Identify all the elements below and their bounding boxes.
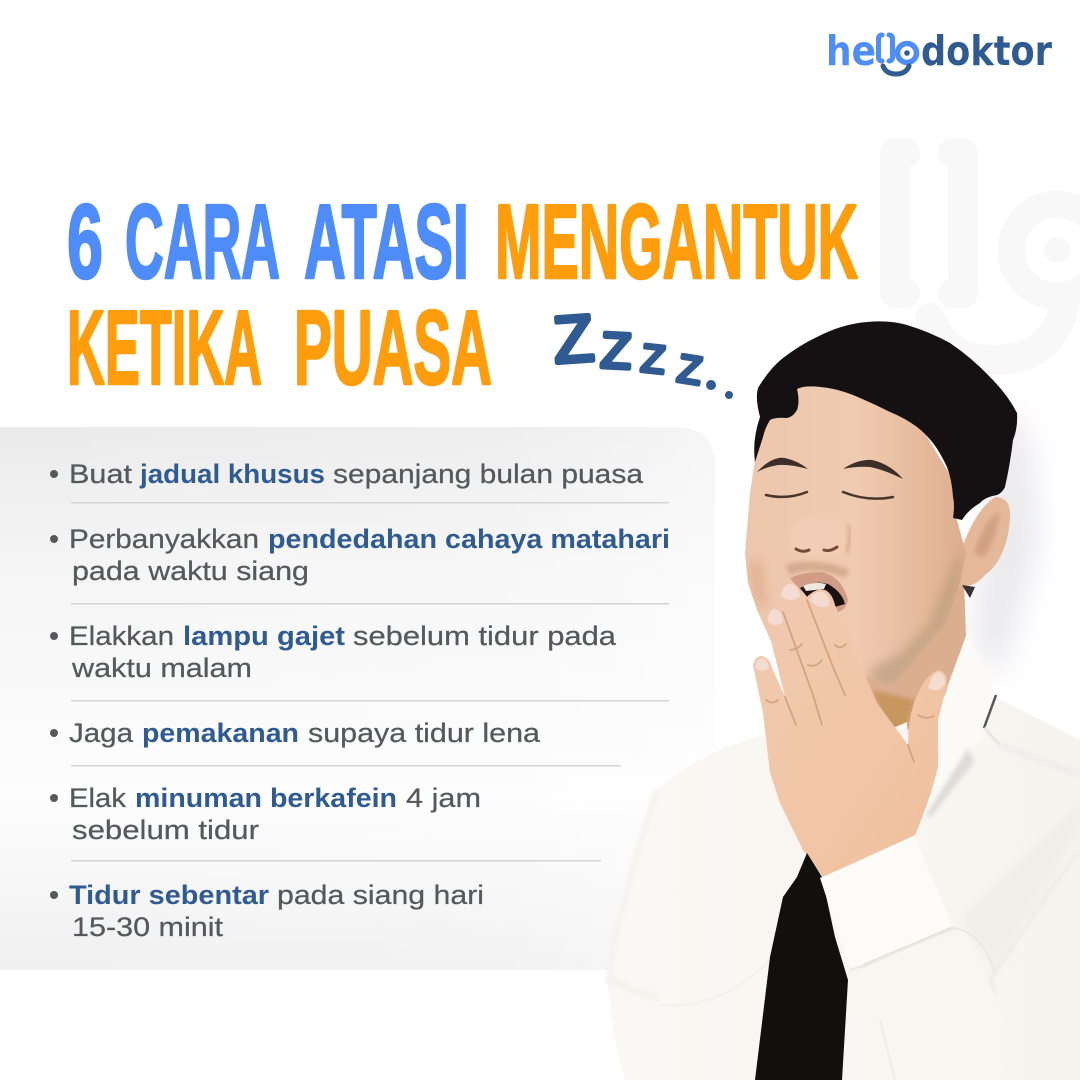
panel background	[0, 427, 715, 970]
tip 3	[50, 621, 617, 683]
tip 3: Elakkan	[69, 621, 174, 651]
title: ATASI	[304, 183, 469, 301]
tip 1: jadual khusus	[139, 459, 325, 489]
necktie	[755, 853, 848, 1080]
shirt cuff and sleeve	[820, 837, 1003, 1080]
photo illustration: yawning man	[608, 321, 1080, 1080]
eyebrows	[757, 458, 903, 479]
mouth	[790, 572, 848, 612]
icon: sleeping Zzzz: Z	[675, 347, 705, 394]
hair	[754, 321, 1017, 520]
tip 4: pemakanan	[142, 718, 299, 748]
tip 6: Tidur sebentar	[69, 880, 270, 910]
tip 5: 4 jam	[406, 783, 481, 813]
icon: sleeping Zzzz: Z	[551, 300, 596, 377]
collar	[893, 633, 1000, 820]
nose	[790, 518, 850, 557]
logo: hellodoktor: he	[826, 27, 876, 75]
title: CARA	[125, 183, 280, 301]
logo: hellodoktor	[826, 27, 1053, 75]
tip 1	[50, 459, 644, 489]
icon: sleeping Zzzz: Z	[599, 322, 633, 380]
logo: hellodoktor: doktor	[921, 27, 1053, 75]
title	[67, 183, 858, 407]
tip 6	[50, 880, 484, 942]
fingernails	[755, 584, 945, 690]
tip 1: sepanjang bulan puasa	[333, 459, 644, 489]
face	[745, 385, 966, 690]
tip 2: pendedahan cahaya matahari	[268, 524, 670, 554]
title: 6	[67, 183, 103, 301]
jaw stubble	[748, 545, 962, 690]
icon: sleeping Zzzz	[551, 300, 733, 399]
neck	[860, 582, 966, 738]
watermark: stethoscope logo motif	[895, 153, 1080, 360]
tip 6: 15-30 minit	[72, 912, 224, 942]
hand covering mouth	[753, 582, 947, 877]
tip 3: waktu malam	[71, 653, 252, 683]
tip 4: Jaga	[69, 718, 134, 748]
title: KETIKA	[67, 289, 262, 407]
tip 6: pada siang hari	[277, 880, 484, 910]
ear	[958, 497, 1010, 598]
shirt	[608, 633, 1080, 1080]
tip 5: sebelum tidur	[72, 815, 259, 845]
tip 5: Elak	[69, 783, 127, 813]
tip 4	[50, 718, 541, 748]
tip 5	[50, 783, 481, 845]
finger separations	[766, 600, 934, 762]
tip 3: sebelum tidur pada	[353, 621, 617, 651]
tip 2: Perbanyakkan	[69, 524, 259, 554]
drop shadow behind person	[970, 400, 1040, 680]
tip 1: Buat	[69, 459, 133, 489]
tip 2	[50, 524, 670, 586]
icon: sleeping Zzzz: Z	[639, 337, 667, 382]
title: PUASA	[294, 289, 492, 407]
tip 5: minuman berkafein	[135, 783, 397, 813]
tip 3: lampu gajet	[183, 621, 345, 651]
tip 4: supaya tidur lena	[308, 718, 541, 748]
panel: tips list	[0, 427, 715, 970]
tip 2: pada waktu siang	[72, 556, 309, 586]
closed eyes	[766, 492, 893, 499]
